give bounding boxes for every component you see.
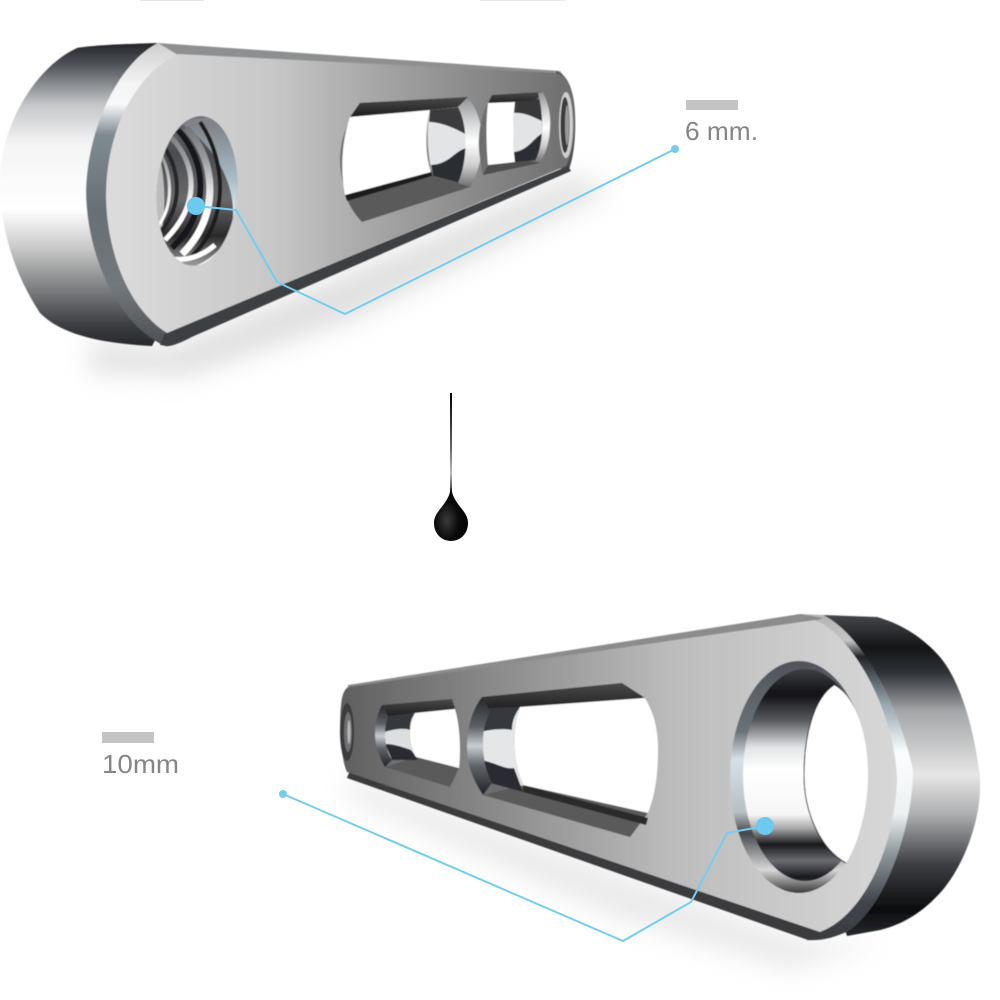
small slot opening bbox=[479, 92, 550, 175]
bottom wrench: small slot bbox=[375, 699, 460, 787]
bottom wrench: bevelled rim bbox=[800, 614, 913, 940]
top wrench: tip edge bbox=[556, 71, 575, 172]
callout: 6 mm bbox=[187, 100, 758, 314]
tip hole opening bbox=[340, 703, 354, 761]
drop line bbox=[450, 393, 452, 493]
top wrench: large slot bbox=[340, 97, 482, 222]
bottom wrench: flat face bbox=[340, 620, 897, 932]
shadow: bottom wrench bbox=[345, 775, 880, 970]
label: 6 mm: 6 mm. bbox=[685, 116, 758, 146]
drop shape bbox=[434, 487, 468, 541]
bottom wrench: tip hole bbox=[340, 703, 354, 761]
bottom wrench: lower edge bevel bbox=[347, 770, 822, 940]
big hole wall bbox=[743, 669, 867, 881]
top wrench: threaded hole bbox=[156, 116, 238, 266]
label bar: 6 mm bbox=[686, 100, 738, 110]
top wrench: tip hole bbox=[559, 92, 573, 158]
shadow: top wrench bbox=[90, 176, 610, 375]
callout line: 6 mm bbox=[196, 149, 675, 314]
callout: 10 mm bbox=[102, 732, 774, 941]
label bar: 10 mm bbox=[102, 732, 154, 743]
callout dot on hole: 6 mm bbox=[187, 197, 205, 215]
bottom wrench: big hole bbox=[730, 661, 868, 893]
big hole white opening bbox=[804, 685, 868, 863]
large slot opening bbox=[340, 97, 482, 222]
large slot opening bbox=[467, 683, 657, 837]
top wrench: lower edge bevel bbox=[160, 166, 571, 346]
top wrench: upper edge bevel bbox=[158, 43, 568, 82]
top wrench: flat face bbox=[106, 54, 574, 333]
bottom wrench: curved outer side bbox=[800, 615, 980, 936]
bottom wrench: 10 mm smooth hole bbox=[340, 614, 980, 940]
bottom wrench: upper edge bevel bbox=[348, 614, 823, 689]
top wrench: 6 mm threaded hole bbox=[0, 43, 575, 346]
drop divider bbox=[434, 393, 468, 541]
callout dot on hole: 10 mm bbox=[756, 817, 774, 835]
callout line: 10 mm bbox=[283, 794, 765, 941]
big hole rim bbox=[730, 661, 868, 893]
callout end dot: 6 mm bbox=[671, 145, 679, 153]
bottom wrench: large slot bbox=[467, 683, 658, 837]
threaded hole opening bbox=[156, 116, 238, 266]
top wrench: curved outer side bbox=[0, 43, 230, 346]
top wrench: small slot bbox=[479, 92, 550, 175]
label: 10 mm: 10mm bbox=[102, 749, 179, 779]
top wrench: bevelled rim bbox=[86, 43, 210, 346]
small slot opening bbox=[375, 699, 460, 787]
callout end dot: 10 mm bbox=[279, 790, 287, 798]
tip hole opening bbox=[559, 92, 573, 158]
